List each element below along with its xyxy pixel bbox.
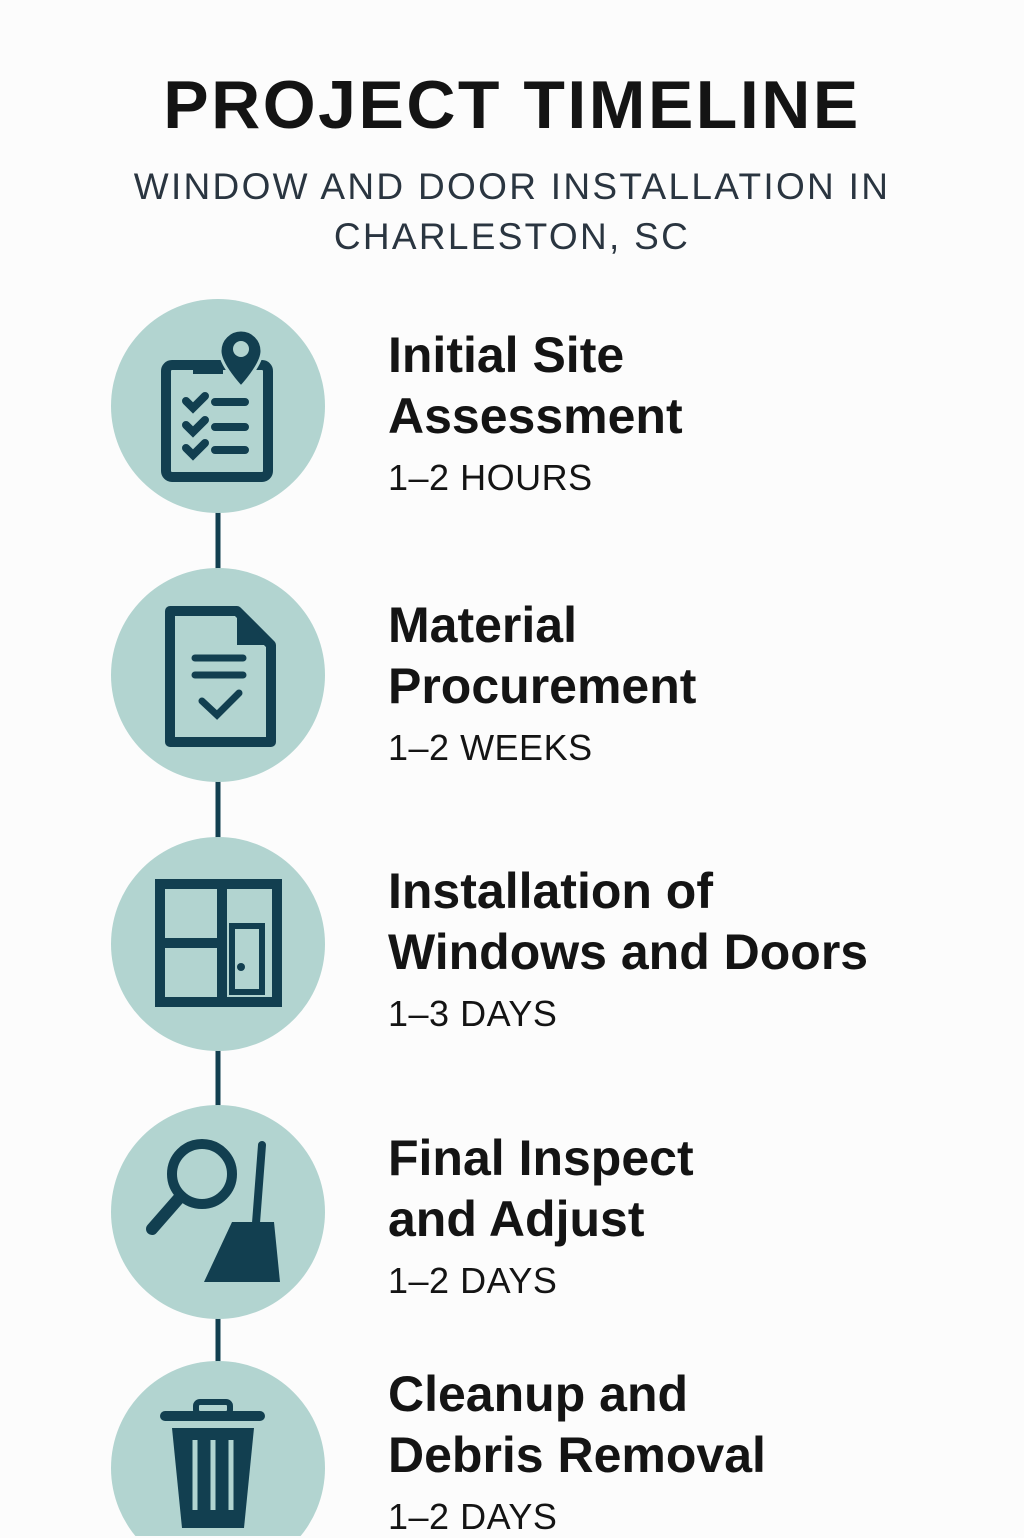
- connector line: [216, 500, 220, 1400]
- step 5 text: 1–2 DAYS: [388, 1496, 557, 1537]
- step 2 text: Procurement: [388, 658, 696, 714]
- step 3 text: 1–3 DAYS: [388, 993, 557, 1034]
- icon: document with check: [111, 568, 325, 782]
- step 5 text: Cleanup and: [388, 1366, 688, 1422]
- step 2 text: [388, 597, 696, 768]
- step 3 text: Installation of: [388, 863, 713, 919]
- step 4 text: and Adjust: [388, 1191, 644, 1247]
- icon: window and door: [111, 837, 325, 1051]
- step 3 text: [388, 863, 868, 1034]
- title: PROJECT TIMELINE: [163, 67, 861, 143]
- step 2 text: 1–2 WEEKS: [388, 727, 593, 768]
- step 4 text: [388, 1130, 694, 1301]
- icon: clipboard checklist with pin: [111, 299, 325, 513]
- step 3 text: Windows and Doors: [388, 924, 868, 980]
- subtitle: [134, 166, 890, 257]
- step 1 text: [388, 327, 683, 498]
- subtitle: WINDOW AND DOOR INSTALLATION IN: [134, 166, 890, 207]
- step 1 text: 1–2 HOURS: [388, 457, 593, 498]
- step 1 text: Assessment: [388, 388, 683, 444]
- subtitle: CHARLESTON, SC: [334, 216, 690, 257]
- icon: trash bin: [111, 1361, 325, 1538]
- step 4 text: 1–2 DAYS: [388, 1260, 557, 1301]
- step 2 text: Material: [388, 597, 577, 653]
- step 5 text: Debris Removal: [388, 1427, 766, 1483]
- step 1 text: Initial Site: [388, 327, 624, 383]
- icon: magnifier and broom: [111, 1105, 325, 1319]
- step 4 text: Final Inspect: [388, 1130, 694, 1186]
- step 5 text: [388, 1366, 766, 1537]
